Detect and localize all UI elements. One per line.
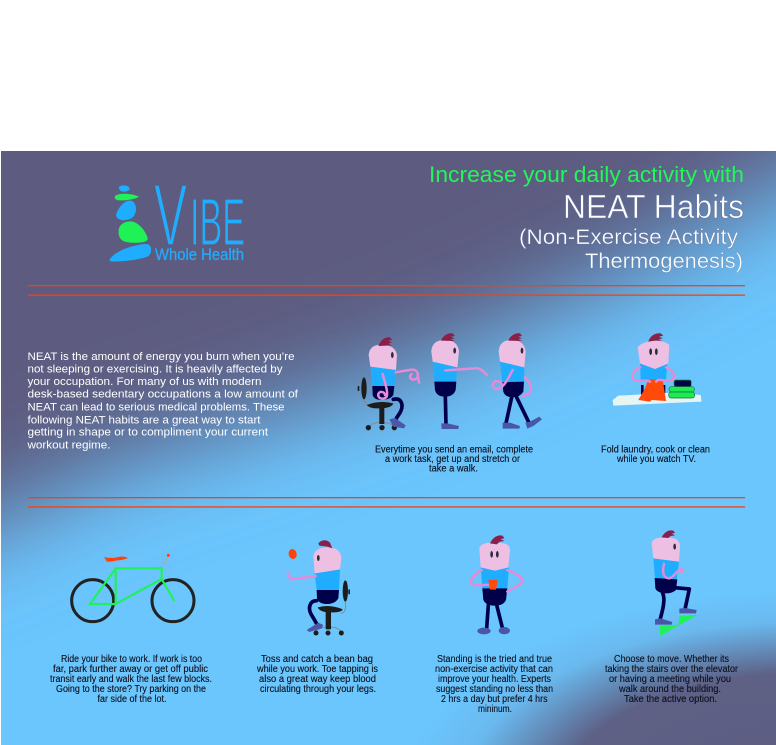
caption: bean bag: also a great way keep blood	[259, 674, 376, 685]
caption: standing: suggest standing no less than	[436, 684, 553, 695]
intro paragraph: getting in shape or to compliment your current	[28, 427, 269, 439]
subtitle line 2: Thermogenesis)	[585, 250, 743, 273]
illustration: bicycle	[72, 554, 194, 622]
caption: laundry: while you watch TV.	[616, 454, 696, 465]
title kicker: Increase your daily activity with	[429, 162, 744, 187]
intro paragraph: workout regime.	[26, 439, 110, 451]
illustration: figure climbing stairs	[652, 530, 697, 636]
icon: bean bag	[288, 548, 298, 560]
caption: standing: improve your health. Experts	[438, 674, 551, 685]
background panel	[1, 151, 776, 745]
caption: email: take a walk.	[429, 464, 478, 474]
figure: standing and stretching	[431, 333, 487, 429]
caption: bike: transit early and walk the last few blocks.	[50, 674, 212, 685]
title block	[429, 162, 744, 273]
main title: NEAT Habits	[563, 188, 744, 225]
caption: email: Everytime you send an email, complete	[375, 444, 534, 456]
caption: bike: far, park further away or get off public	[53, 664, 208, 675]
caption: bean bag: circulating through your legs.	[260, 684, 376, 695]
caption: bike: far side of the lot.	[98, 694, 166, 705]
caption: email: a work task, get up and stretch or	[385, 454, 521, 465]
intro paragraph: not sleeping or exercising. It is heavily affected by	[28, 364, 283, 376]
caption: choose to move: Take the active option.	[624, 694, 717, 705]
illustration: standing figure with cup	[471, 535, 523, 634]
caption: bike: Going to the store? Try parking on the	[56, 684, 207, 695]
figure: walking	[493, 333, 542, 429]
caption: bean bag	[256, 654, 378, 695]
caption: choose to move: taking the stairs over the elevator	[605, 664, 739, 675]
caption: bean bag: Toss and catch a bean bag	[261, 654, 373, 665]
intro paragraph: desk-based sedentary occupations a low amount of	[28, 389, 299, 401]
caption: standing	[435, 654, 553, 715]
illustration: three figures moving from the desk	[358, 333, 542, 430]
figure: seated at chair	[358, 337, 419, 430]
caption: standing: mininum.	[478, 704, 512, 715]
logo wordmark	[154, 167, 245, 264]
illustration: figure folding laundry	[613, 333, 702, 406]
caption: laundry	[601, 444, 710, 465]
caption: bean bag: while you work. Toe tapping is	[256, 664, 378, 675]
intro paragraph: NEAT is the amount of energy you burn when you’re	[28, 351, 294, 363]
subtitle line 1: (Non-Exercise Activity	[519, 226, 739, 249]
intro paragraph: NEAT can lead to serious medical problems. These	[28, 402, 284, 414]
intro paragraph: following NEAT habits are a great way to start	[28, 414, 261, 426]
logo stones	[109, 185, 151, 261]
logo wordmark: V	[154, 167, 187, 264]
caption: choose to move: or having a meeting while you	[609, 674, 731, 685]
intro paragraph: your occupation. For many of us with modern	[28, 376, 262, 388]
logo: Vibe Whole Health	[109, 167, 245, 264]
caption: laundry: Fold laundry, cook or clean	[601, 444, 710, 456]
caption: standing: non-exercise activity that can	[435, 664, 553, 675]
intro paragraph	[26, 351, 299, 451]
caption: standing: Standing is the tried and true	[437, 654, 553, 665]
caption: bike: Ride your bike to work. If work is too	[61, 654, 202, 665]
caption: choose to move: walk around the building.	[618, 684, 721, 695]
caption: standing: 2 hrs a day but prefer 4 hrs	[441, 694, 548, 705]
caption: choose to move	[605, 654, 739, 705]
logo wordmark: IBE	[190, 185, 245, 260]
caption: bike	[50, 654, 212, 705]
caption: email	[375, 444, 534, 474]
logo tagline: Whole Health	[155, 246, 244, 264]
illustration: figure tossing bean bag	[288, 540, 350, 635]
caption: choose to move: Choose to move. Whether its	[614, 654, 729, 665]
